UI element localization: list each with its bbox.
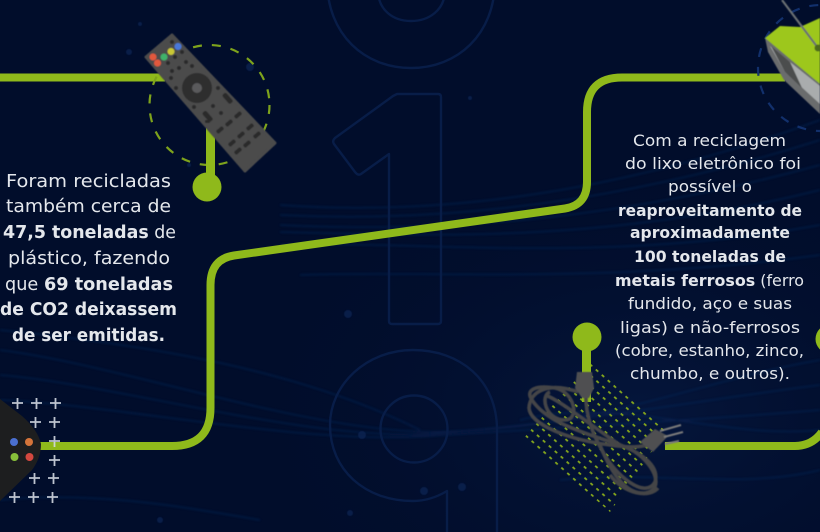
green connector line: right bottom <box>665 432 820 446</box>
text block: metals: do lixo eletrônico foi <box>625 154 801 173</box>
plus sign grid <box>9 398 61 503</box>
text block: plastic: Foram recicladas <box>6 171 171 192</box>
text block: metals: 100 toneladas de <box>634 247 786 266</box>
text block: metals: Com a reciclagem <box>633 131 786 150</box>
icon: tv <box>765 0 820 114</box>
text block: plastic: de ser emitidas. <box>12 325 165 346</box>
text block: plastic: também cerca de <box>6 196 171 217</box>
cable node and stem <box>572 322 602 402</box>
dashed circle around remote <box>150 45 270 165</box>
text block: metals: ligas) e não-ferrosos <box>620 318 800 337</box>
green connector line: left <box>0 74 165 82</box>
icon: power cable <box>529 372 683 494</box>
green stem and node <box>192 128 222 202</box>
green dot pattern <box>524 358 668 512</box>
text block: metals: fundido, aço e suas <box>628 294 792 313</box>
text block: metals <box>615 131 804 383</box>
text block: plastic: 47,5 toneladas de <box>3 222 176 243</box>
text block: metals: possível o <box>668 177 752 196</box>
number outlines: 0 1 9 <box>327 0 497 532</box>
green connector line: central path <box>38 78 785 446</box>
text block: plastic: que 69 toneladas <box>5 274 173 295</box>
icon: game controller <box>0 399 41 501</box>
icon: remote control <box>146 35 275 171</box>
text block: metals: chumbo, e outros). <box>630 364 790 383</box>
text block: metals: metais ferrosos (ferro <box>615 271 804 290</box>
right edge node <box>816 324 820 354</box>
text block: plastic: de CO2 deixassem <box>0 299 177 320</box>
dashed circle around tv <box>758 5 820 131</box>
text block: plastic: plástico, fazendo <box>8 248 170 269</box>
text block: metals: aproximadamente <box>630 223 790 242</box>
text block: plastic <box>0 171 177 346</box>
text block: metals: (cobre, estanho, zinco, <box>615 341 804 360</box>
text block: metals: reaproveitamento de <box>618 201 802 220</box>
